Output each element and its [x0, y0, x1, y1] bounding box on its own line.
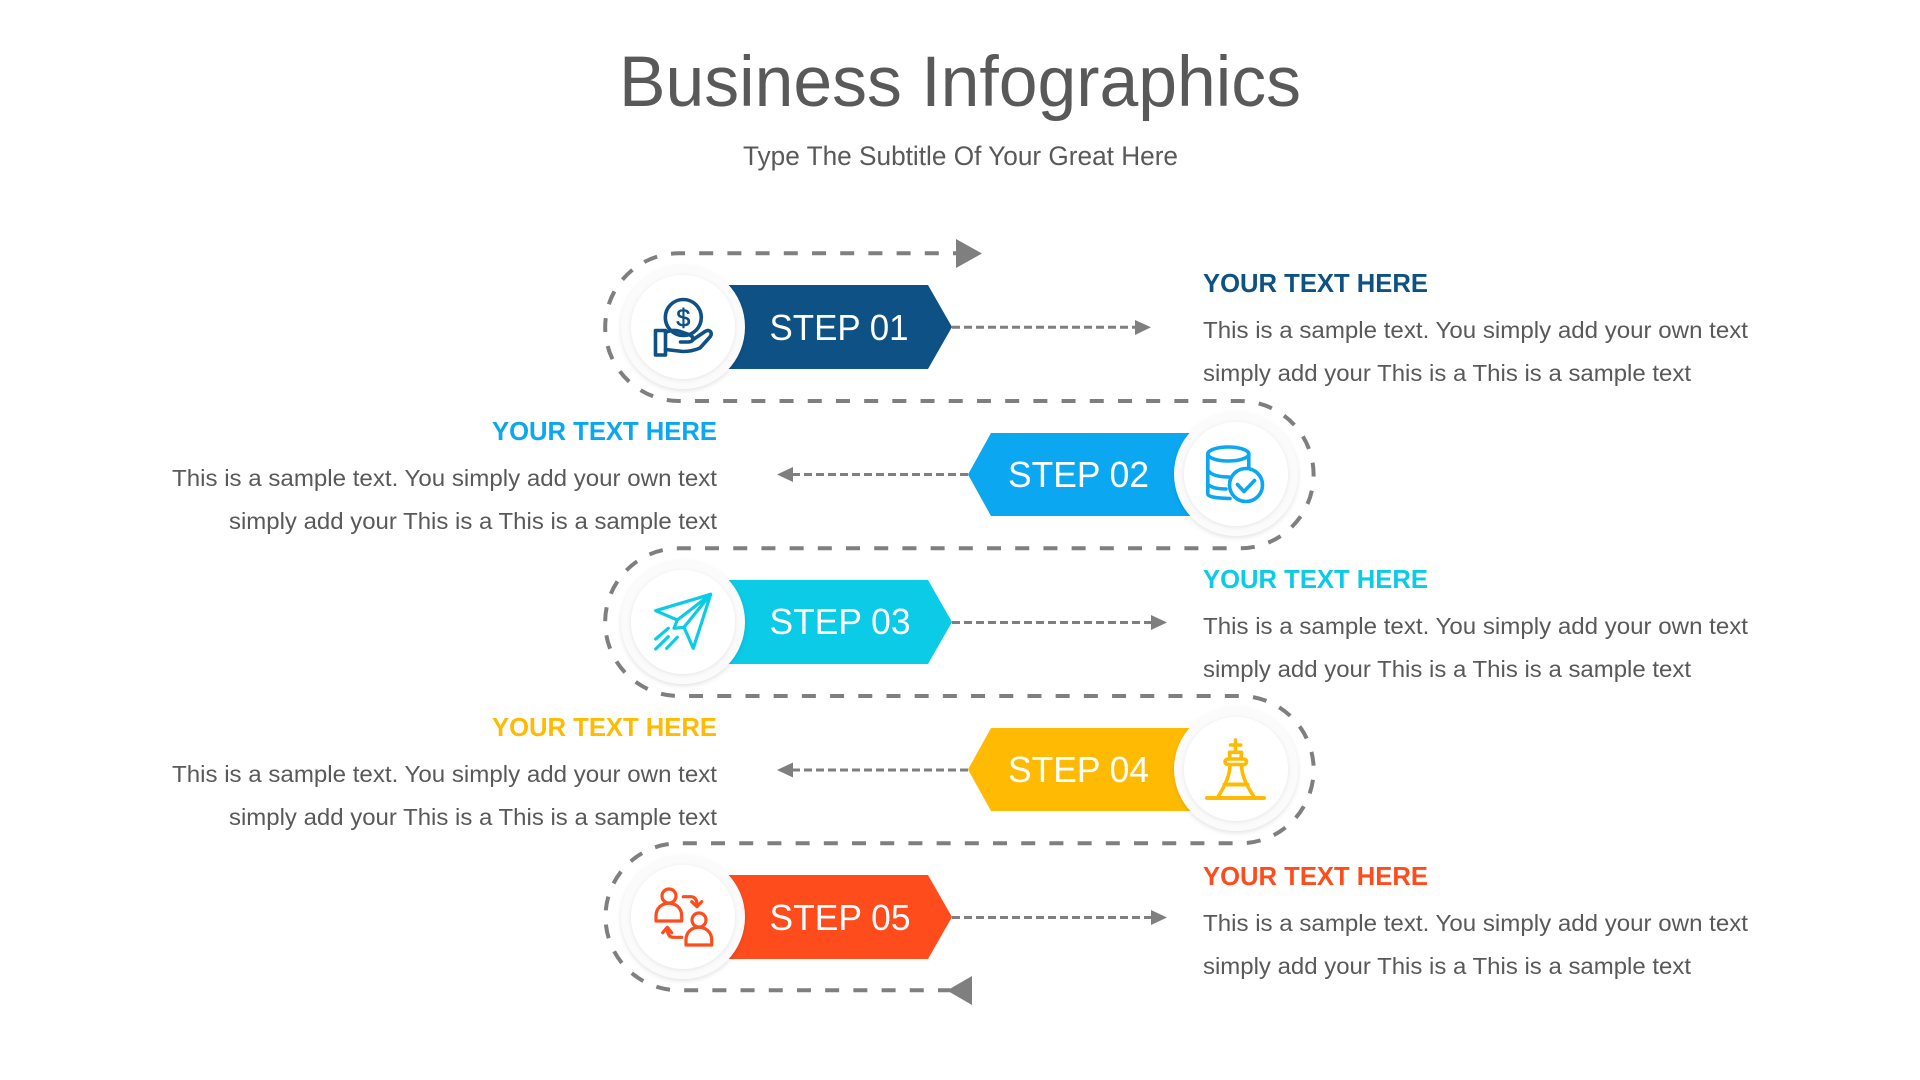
badge circle 04	[1174, 707, 1298, 831]
step 01 row	[621, 265, 1151, 389]
icon: paper plane	[656, 594, 711, 649]
arrow: path start	[956, 239, 982, 268]
connector arrow 03	[952, 615, 1167, 630]
ribbon 02	[968, 433, 1236, 516]
text block 04: YOUR TEXT HERE	[492, 712, 717, 742]
label 02: STEP 02	[1008, 454, 1149, 495]
text block 02	[172, 416, 718, 534]
label 01: STEP 01	[770, 307, 908, 348]
text block 05	[1203, 861, 1749, 979]
text block 03	[1203, 564, 1749, 682]
icon: people exchange	[656, 889, 712, 945]
text block 05: This is a sample text. You simply add your own text	[1203, 910, 1749, 936]
ribbon 04	[968, 728, 1236, 811]
step 05 row	[621, 855, 1167, 979]
icon: hand holding coin: $	[676, 304, 690, 332]
ribbon 05	[683, 875, 952, 959]
text block 01: simply add your This is a This is a sample text	[1203, 360, 1692, 386]
connector arrow 02	[777, 467, 968, 482]
text block 03: This is a sample text. You simply add your own text	[1203, 613, 1749, 639]
step 02 row	[777, 412, 1298, 536]
step 03 row	[621, 560, 1167, 684]
text block 02: YOUR TEXT HERE	[492, 416, 717, 446]
icon: chess king	[1207, 740, 1264, 798]
badge circle 01	[621, 265, 745, 389]
label 04: STEP 04	[1008, 749, 1149, 790]
label 03: STEP 03	[770, 601, 910, 642]
text block 04: This is a sample text. You simply add your own text	[172, 761, 718, 787]
badge circle 02	[1174, 412, 1298, 536]
label 05: STEP 05	[770, 897, 910, 938]
ribbon 01	[683, 285, 952, 369]
text block 02: This is a sample text. You simply add your own text	[172, 465, 718, 491]
dashed serpentine path	[605, 239, 1314, 1005]
text block 04: simply add your This is a This is a sample text	[229, 804, 718, 830]
text block 03: simply add your This is a This is a sample text	[1203, 656, 1692, 682]
text block 01	[1203, 268, 1749, 386]
text block 05: simply add your This is a This is a sample text	[1203, 953, 1692, 979]
icon: database check	[1208, 447, 1262, 502]
text block 01: YOUR TEXT HERE	[1203, 268, 1428, 298]
step 04 row	[777, 707, 1298, 831]
badge circle 03	[621, 560, 745, 684]
connector arrow 04	[777, 762, 968, 778]
arrow: path end	[947, 976, 972, 1005]
text block 05: YOUR TEXT HERE	[1203, 861, 1428, 891]
badge circle 05	[621, 855, 745, 979]
title: Business Infographics	[619, 43, 1301, 122]
text block 03: YOUR TEXT HERE	[1203, 564, 1428, 594]
ribbon 03	[683, 580, 952, 664]
connector arrow 05	[952, 910, 1167, 925]
icon: hand holding coin	[656, 300, 711, 355]
connector arrow 01	[952, 320, 1151, 335]
text block 01: This is a sample text. You simply add your own text	[1203, 317, 1749, 343]
text block 02: simply add your This is a This is a sample text	[229, 508, 718, 534]
subtitle: Type The Subtitle Of Your Great Here	[743, 141, 1178, 171]
text block 04	[172, 712, 718, 830]
